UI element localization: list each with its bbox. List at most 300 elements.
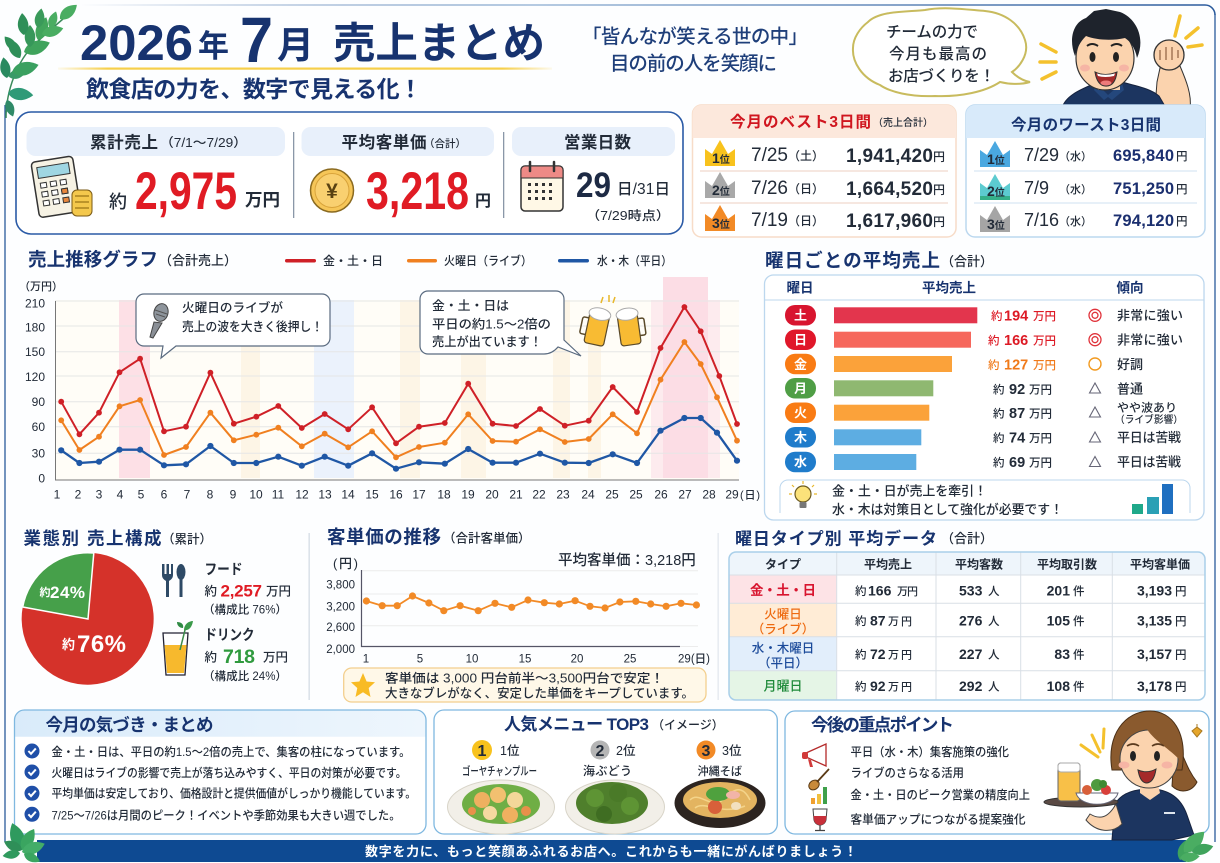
heading: average spend trend: （合計客単価） xyxy=(443,530,531,546)
speech bubble: man: お店づくりを！ xyxy=(888,67,995,85)
y axis labels: 180 xyxy=(25,320,45,334)
row: Monday: 約 xyxy=(993,382,1004,396)
x axis labels: 26 xyxy=(654,488,668,502)
image: okinawa soba xyxy=(674,778,766,828)
row: Monday: 3,178 xyxy=(1137,678,1172,694)
note: weekend lead xyxy=(780,480,1190,517)
row: Wed Thu: 万円 xyxy=(888,648,912,662)
heading: sales trend: 売上推移グラフ xyxy=(28,249,158,270)
menu item 1 xyxy=(448,740,554,834)
KPI: business days: 営業日数 xyxy=(564,133,632,152)
row: Monday: 月曜日 xyxy=(763,678,803,694)
row: Thursday xyxy=(785,427,1181,448)
y axis labels: 30 xyxy=(32,446,45,460)
panel: next priorities xyxy=(785,711,1209,834)
average spend label: 平均客単価：3,218円 xyxy=(558,552,696,569)
illustration: cheering man xyxy=(1040,9,1202,108)
row: Wed Thu: 水・木曜日 xyxy=(752,640,814,656)
y axis labels: （万円） xyxy=(19,280,63,293)
line chart: average spend: 2,600 xyxy=(326,622,355,634)
panel: next priorities: 今後の重点ポイント xyxy=(811,715,954,735)
drink share: ドリンク xyxy=(204,627,254,644)
panel: monthly notes: 今月の気づき・まとめ xyxy=(46,715,214,735)
x axis labels: 21 xyxy=(509,488,523,502)
row: Friday xyxy=(785,354,1143,374)
row: Tuesday: （ライブ影響） xyxy=(1115,413,1183,426)
line chart: average spend: (円) xyxy=(333,556,358,571)
row: worst 3: 3位 xyxy=(987,216,1005,232)
row: Monday: 件 xyxy=(1073,680,1085,694)
row: Friday: 万円 xyxy=(1033,359,1056,372)
row: Tuesday: やや波あり xyxy=(1117,402,1177,414)
x axis labels: 22 xyxy=(532,488,546,502)
line chart: average spend: 3,200 xyxy=(326,602,355,614)
line: Wed Thu xyxy=(61,418,737,469)
legend xyxy=(285,253,672,268)
row: best 3: 3位 xyxy=(712,215,730,231)
row: Sunday: 非常に強い xyxy=(1117,332,1183,348)
panel: best 3 days: 今月のベスト3日間 xyxy=(730,112,871,131)
panel: popular menu: （イメージ） xyxy=(652,718,724,732)
motto: 目の前の人を笑顔に xyxy=(610,53,777,75)
row: Tuesday live: 火曜日 xyxy=(764,608,802,622)
row: Sunday: 約 xyxy=(988,334,1000,348)
row: Thursday: 約 xyxy=(993,431,1004,445)
row: Monday xyxy=(763,678,1186,694)
priority 4 xyxy=(813,809,1026,830)
y axis labels: 90 xyxy=(32,395,45,409)
row: Monday: 月 xyxy=(794,381,807,396)
row: Wednesday: 約 xyxy=(993,456,1004,470)
x axis labels: 25 xyxy=(605,488,619,502)
row: Tuesday live: 人 xyxy=(988,615,1000,628)
priority 3 xyxy=(811,787,1030,804)
row: Monday: 約 xyxy=(855,680,866,694)
x axis labels: 2 xyxy=(75,488,82,502)
row: worst 3 xyxy=(980,206,1188,232)
priority 1 xyxy=(802,744,1009,767)
row: best 1: 1,941,420 xyxy=(846,146,933,167)
row: worst 3: （水） xyxy=(1059,214,1092,228)
row: Tuesday: 87 xyxy=(1009,406,1025,422)
callout: stable spend xyxy=(344,668,706,702)
row: Sunday xyxy=(785,330,1183,350)
row: worst 3: 円 xyxy=(1176,215,1188,228)
title: 売上まとめ xyxy=(333,21,545,68)
table header: 平均客数 xyxy=(955,556,1003,572)
row: Saturday: 約 xyxy=(991,309,1002,323)
row: Tuesday live xyxy=(752,608,1186,636)
line chart: average spend: 5 xyxy=(417,654,423,666)
row: Wed Thu: 3,157 xyxy=(1137,646,1172,662)
heading: sales mix: 業態別 売上構成 xyxy=(24,528,162,548)
row: Monday: 92 xyxy=(1009,382,1025,398)
title: 2026 xyxy=(80,15,193,71)
row: Sunday: 日 xyxy=(794,332,807,348)
food share: 万円 xyxy=(266,584,291,598)
icon: calculator xyxy=(31,156,92,218)
row: Fri Sat Sun: 金・土・日 xyxy=(750,582,816,598)
row: Wednesday xyxy=(785,452,1181,472)
row: Saturday: 土 xyxy=(794,308,807,323)
panel: best 3 days xyxy=(692,105,956,237)
y axis labels: 150 xyxy=(25,345,45,359)
table: day type averages xyxy=(729,552,1205,700)
icon: megaphone xyxy=(802,744,826,767)
icon: guitar xyxy=(807,769,829,792)
row: Sunday: 万円 xyxy=(1033,334,1056,348)
row: worst 1: 7/29 xyxy=(1024,145,1059,165)
KPI: average spend: 3,218 xyxy=(366,162,469,221)
x axis labels: 10 xyxy=(249,488,263,502)
row: worst 3: 7/16 xyxy=(1024,210,1059,230)
callout: weekend: 平日の約1.5～2倍の xyxy=(432,316,551,332)
row: Tuesday: 約 xyxy=(993,406,1004,420)
heading: type table: （合計） xyxy=(941,531,993,546)
row: Fri Sat Sun: 3,193 xyxy=(1137,582,1172,598)
line chart: average spend: 2,000 xyxy=(326,644,355,656)
title: 月 xyxy=(277,25,314,66)
decoration: top-left leaves xyxy=(0,1,80,118)
row: Monday: 万円 xyxy=(1029,384,1052,396)
menu item 2: 2位 xyxy=(616,744,636,758)
line chart: average spend: 3,800 xyxy=(326,580,355,592)
menu item 3: 沖縄そば xyxy=(698,764,742,778)
x axis labels: 25 xyxy=(629,488,643,502)
row: Tuesday live: 円 xyxy=(1175,615,1186,628)
row: worst 1: 円 xyxy=(1176,150,1188,163)
row: Friday: 127 xyxy=(1004,358,1028,374)
row: Friday: 金 xyxy=(794,357,807,372)
menu item 1: 1 xyxy=(478,743,487,760)
x axis labels: 19 xyxy=(461,488,475,502)
row: Monday: 108 xyxy=(1047,678,1070,694)
row: Tuesday: 火 xyxy=(794,406,807,420)
icon: bars xyxy=(811,787,827,804)
row: Tuesday live: 276 xyxy=(959,612,983,628)
menu item 3: 3 xyxy=(702,743,711,760)
KPI: average spend: 円 xyxy=(475,193,491,210)
priority 2: ライブのさらなる活用 xyxy=(850,765,964,780)
panel: weekday table: 傾向 xyxy=(1116,280,1144,296)
KPI: cumulative sales: 万円 xyxy=(245,190,280,210)
x axis labels: 17 xyxy=(412,488,426,502)
x axis labels: 15 xyxy=(365,488,379,502)
line chart: daily sales xyxy=(19,277,760,502)
line chart: average spend xyxy=(326,556,710,666)
row: worst 1: 1位 xyxy=(987,151,1005,167)
row: best 2 xyxy=(705,172,945,200)
KPI: cumulative sales xyxy=(26,127,285,221)
row: Thursday: 平日は苦戦 xyxy=(1117,430,1181,445)
image: sea grapes xyxy=(566,780,664,834)
table header: 平均取引数 xyxy=(1037,556,1097,572)
x axis labels: 8 xyxy=(207,488,214,502)
KPI: cumulative sales: （7/1～7/29） xyxy=(160,136,247,150)
note: weekend lead: 金・土・日が売上を牽引！ xyxy=(832,484,987,498)
row: Fri Sat Sun: 166 xyxy=(868,582,892,598)
panel: weekday table: 平均売上 xyxy=(922,280,976,296)
image: goya champuru xyxy=(448,780,554,834)
table header: 平均売上 xyxy=(864,556,912,572)
row: Friday: 好調 xyxy=(1117,357,1143,372)
priority 4: 客単価アップにつながる提案強化 xyxy=(850,812,1026,826)
row: Monday: 普通 xyxy=(1117,382,1143,396)
menu item 2 xyxy=(566,740,664,834)
speech bubble: man xyxy=(853,8,1030,96)
table header: 平均客単価 xyxy=(1130,556,1190,572)
row: Monday: 92 xyxy=(870,678,886,694)
panel: popular menu: 人気メニュー TOP3 xyxy=(504,715,649,734)
x axis labels: 4 xyxy=(117,488,124,502)
row: best 2: 2位 xyxy=(712,182,730,198)
x axis labels: 9 xyxy=(230,488,237,502)
row: worst 2: 2位 xyxy=(987,183,1005,199)
priority 1: 平日（水・木）集客施策の強化 xyxy=(850,744,1009,759)
row: Wed Thu: 227 xyxy=(959,646,983,662)
heading: weekday average: （合計） xyxy=(941,254,993,269)
callout: Tuesday live: 売上の波を大きく後押し！ xyxy=(182,319,323,334)
row: Wednesday: 万円 xyxy=(1029,457,1052,470)
panel: weekday table: 曜日 xyxy=(786,280,814,296)
food share: （構成比 76%） xyxy=(203,602,287,616)
row: best 2: 円 xyxy=(933,183,945,197)
footer bar: 数字を力に、もっと笑顔あふれるお店へ。これからも一緒にがんばりましょう！ xyxy=(365,844,857,859)
heading: average spend trend: 客単価の推移 xyxy=(327,526,441,548)
x axis labels: 6 xyxy=(161,488,168,502)
speech bubble: man: 今月も最高の xyxy=(889,45,987,63)
row: best 1 xyxy=(705,140,945,167)
x axis labels: 16 xyxy=(389,488,403,502)
icon: light bulb xyxy=(789,481,817,508)
row: Tuesday: 万円 xyxy=(1029,408,1052,420)
x axis labels: 7 xyxy=(184,488,191,502)
row: best 3: 1,617,960 xyxy=(846,211,933,232)
x axis labels: 23 xyxy=(556,488,570,502)
row: Tuesday live: 約 xyxy=(855,614,866,628)
panel: worst 3 days: 今月のワースト3日間 xyxy=(1011,115,1161,134)
icon: yen coin: ¥ xyxy=(326,180,338,203)
title: 年 xyxy=(198,29,229,64)
footer bar xyxy=(37,840,1186,862)
line chart: average spend: 29(日) xyxy=(678,652,710,666)
drink share: 718 xyxy=(223,646,255,668)
row: Wed Thu: 円 xyxy=(1175,648,1186,662)
note: weekend lead: 水・木は対策日として強化が必要です！ xyxy=(832,502,1063,517)
priority 3: 金・土・日のピーク営業の精度向上 xyxy=(850,787,1030,802)
drink share: 万円 xyxy=(263,650,288,664)
line chart: average spend: 1 xyxy=(363,654,369,666)
row: best 3: 7/19 xyxy=(751,210,788,231)
row: worst 2: 円 xyxy=(1176,183,1188,196)
callout: weekend: 金・土・日は xyxy=(432,298,509,313)
title: 7 xyxy=(240,4,273,76)
drink share: （構成比 24%） xyxy=(203,669,287,683)
row: Tuesday live: 万円 xyxy=(888,615,912,628)
row: best 1: （土） xyxy=(788,149,824,163)
icon: juice glass xyxy=(163,621,193,675)
icon: beer mugs xyxy=(578,295,647,347)
x axis labels xyxy=(54,488,760,502)
drink share xyxy=(163,621,288,683)
x axis labels: 13 xyxy=(318,488,332,502)
row: best 3: 円 xyxy=(933,215,945,229)
food share: 2,257 xyxy=(220,582,262,600)
panel: best 3 days: （売上合計） xyxy=(873,116,933,129)
row: Fri Sat Sun: 円 xyxy=(1175,585,1186,598)
row: best 2: 7/26 xyxy=(751,178,788,199)
row: Monday: 円 xyxy=(1175,680,1186,694)
icon: wine glass xyxy=(813,809,827,830)
heading: type table: 曜日タイプ別 平均データ xyxy=(735,528,937,548)
motto: 「皆んなが笑える世の中」 xyxy=(582,26,808,48)
row: worst 2: 7/9 xyxy=(1024,178,1049,198)
line chart: average spend: 20 xyxy=(571,654,583,666)
decoration: bottom-right leaves xyxy=(1175,827,1215,863)
row: Tuesday live: 3,135 xyxy=(1137,612,1172,628)
x axis labels: 5 xyxy=(138,488,145,502)
callout: stable spend: 客単価は 3,000 円台前半～3,500円台で安定！ xyxy=(385,670,664,686)
row: best 1: 1位 xyxy=(712,150,730,166)
pie chart: food and drink: 約 xyxy=(62,637,75,652)
food share: フード xyxy=(204,562,242,578)
row: Tuesday live: 件 xyxy=(1073,614,1085,628)
row: Wednesday: 水 xyxy=(794,455,807,470)
food share: 約 xyxy=(204,584,217,598)
row: best 1: 7/25 xyxy=(751,145,788,166)
line chart: average spend: 25 xyxy=(624,654,636,666)
drink share: 約 xyxy=(204,650,217,664)
row: best 2: 1,664,520 xyxy=(846,179,933,200)
food share xyxy=(162,562,291,616)
x axis labels: 1 xyxy=(54,488,61,502)
speech bubble: man: チームの力で xyxy=(886,23,978,41)
pie chart: food and drink: 24% xyxy=(50,583,85,602)
row: Tuesday xyxy=(785,402,1183,426)
panel: monthly notes xyxy=(14,710,426,834)
x axis labels: 28 xyxy=(702,488,716,502)
table header: タイプ xyxy=(765,558,801,572)
icon: growth bars xyxy=(1132,484,1173,514)
y axis labels xyxy=(19,280,63,486)
line chart: average spend: 10 xyxy=(466,654,478,666)
row: Wed Thu xyxy=(752,640,1186,670)
row: Saturday: 194 xyxy=(1004,308,1028,324)
heading: sales trend xyxy=(28,249,237,270)
row: Thursday: 木 xyxy=(794,430,807,445)
row: Thursday: 74 xyxy=(1009,430,1025,446)
callout: Tuesday live xyxy=(136,294,330,358)
KPI: cumulative sales: 2,975 xyxy=(135,162,237,221)
legend: 火曜日（ライブ） xyxy=(444,253,532,268)
x axis labels: 18 xyxy=(437,488,451,502)
row: Wed Thu: （平日） xyxy=(758,656,808,670)
panel: popular menu xyxy=(434,710,777,834)
legend: 水・木（平日） xyxy=(597,253,672,268)
heading: average spend trend xyxy=(327,526,531,548)
callout: Tuesday live: 火曜日のライブが xyxy=(182,300,283,315)
row: Friday: 約 xyxy=(988,358,1000,372)
row: worst 3: 794,120 xyxy=(1113,212,1174,230)
x axis labels: 24 xyxy=(581,488,595,502)
note 3: 平均単価は安定しており、価格設計と提供価値がしっかり機能しています。 xyxy=(52,786,416,801)
row: worst 2 xyxy=(980,174,1188,200)
row: Wed Thu: 人 xyxy=(988,648,1000,662)
heading: sales trend: （合計売上） xyxy=(159,253,237,268)
menu item 3: 3位 xyxy=(722,744,742,758)
KPI: cumulative sales: 約 xyxy=(109,192,127,212)
menu item 2: 海ぶどう xyxy=(583,764,632,778)
pie chart: food and drink: 約 xyxy=(40,585,50,599)
menu item 3 xyxy=(674,740,766,828)
row: Fri Sat Sun: 201 xyxy=(1047,582,1070,598)
KPI: business days xyxy=(512,127,675,223)
panel: worst 3 days xyxy=(966,105,1205,237)
row: Fri Sat Sun: 約 xyxy=(855,584,866,598)
row: Fri Sat Sun: 件 xyxy=(1073,584,1085,598)
legend: 金・土・日 xyxy=(323,253,383,268)
KPI: average spend: （合計） xyxy=(424,137,466,150)
row: Wed Thu: 83 xyxy=(1054,646,1070,662)
row: Saturday: 非常に強い xyxy=(1117,308,1183,323)
KPI: cumulative sales: 累計売上 xyxy=(90,133,158,152)
panel: KPI summary xyxy=(16,112,683,234)
row: worst 2: 751,250 xyxy=(1113,180,1174,198)
heading: weekday average: 曜日ごとの平均売上 xyxy=(765,250,940,271)
x axis labels: 12 xyxy=(295,488,309,502)
motto xyxy=(582,26,808,75)
pie chart: food and drink: 76% xyxy=(77,631,126,658)
KPI: business days: 29 xyxy=(576,166,611,205)
x axis labels: 14 xyxy=(341,488,355,502)
title underline xyxy=(58,68,552,70)
row: Tuesday live: 105 xyxy=(1047,612,1070,628)
row: Wednesday: 69 xyxy=(1009,455,1025,471)
row: Saturday xyxy=(785,305,1183,326)
y axis labels: 120 xyxy=(25,370,45,384)
icon: calendar xyxy=(521,162,563,211)
callout: weekend: 売上が出ています！ xyxy=(432,334,542,349)
x axis labels: 27 xyxy=(678,488,692,502)
menu item 1: ゴーヤチャンプルー xyxy=(462,764,537,778)
row: worst 1: 695,840 xyxy=(1113,147,1174,165)
row: Fri Sat Sun: 人 xyxy=(988,585,1000,598)
row: Monday: 人 xyxy=(988,680,1000,694)
KPI: average spend: 平均客単価 xyxy=(342,132,426,152)
table header xyxy=(765,556,1190,572)
row: Fri Sat Sun: 万円 xyxy=(897,585,918,598)
x axis labels: 20 xyxy=(485,488,499,502)
row: Tuesday live: 87 xyxy=(870,612,886,628)
icon: fork and spoon xyxy=(162,564,186,597)
pie chart: food and drink xyxy=(22,553,154,685)
callout: weekend xyxy=(420,291,581,356)
subtitle: 飲食店の力を、数字で見える化！ xyxy=(86,76,422,102)
note 4: 7/25～7/26は月間のピーク！イベントや季節効果も大きい週でした。 xyxy=(52,807,400,822)
y axis labels: 60 xyxy=(32,420,45,434)
line chart: average spend: 15 xyxy=(519,654,531,666)
line: Fri Sat Sun xyxy=(61,307,737,443)
row: worst 1: （水） xyxy=(1059,149,1092,163)
heading: sales mix: （累計） xyxy=(162,532,212,546)
row: Monday xyxy=(785,378,1143,398)
row: best 2: （日） xyxy=(788,182,824,196)
line: Tuesday live xyxy=(61,342,737,457)
decoration: bottom-left leaves xyxy=(2,821,47,863)
row: Monday: 292 xyxy=(959,678,983,694)
row: worst 1 xyxy=(980,141,1188,167)
KPI: business days: 日/31日 xyxy=(617,181,670,198)
